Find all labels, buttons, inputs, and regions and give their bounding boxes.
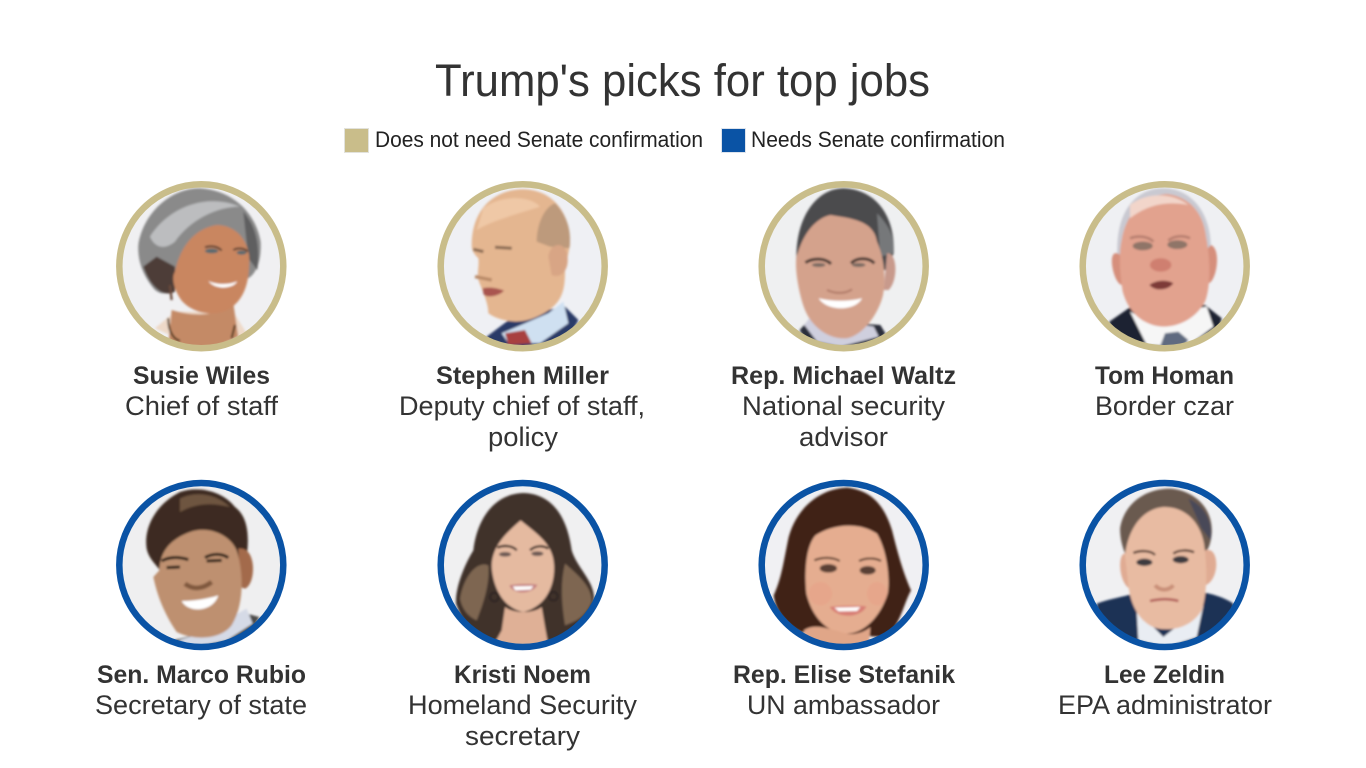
person: Marco Rubio	[95, 482, 307, 720]
portrait: Michael Waltz	[760, 183, 927, 350]
portrait: Stephen Miller	[439, 183, 606, 350]
legend	[344, 127, 1005, 152]
person: Susie Wiles	[118, 183, 285, 421]
person: Michael Waltz	[731, 183, 956, 452]
portrait: Elise Stefanik	[760, 482, 927, 648]
name: Susie Wiles	[133, 362, 270, 390]
name: Rep. Elise Stefanik	[733, 661, 955, 689]
role: National security	[742, 391, 946, 421]
portrait: Kristi Noem	[439, 482, 606, 648]
person: Tom Homan	[1081, 183, 1248, 421]
portrait: Tom Homan	[1081, 183, 1248, 350]
name: Kristi Noem	[454, 661, 591, 689]
person: Lee Zeldin	[1058, 482, 1272, 720]
portrait: Marco Rubio	[118, 482, 285, 650]
role line 2: policy	[488, 422, 559, 452]
legend label: does not need confirmation: Does not need Senate confirmation	[375, 127, 703, 152]
role: Secretary of state	[95, 690, 307, 720]
legend swatch: needs confirmation	[722, 128, 746, 152]
role: UN ambassador	[747, 690, 940, 720]
name: Lee Zeldin	[1104, 661, 1225, 689]
role: Chief of staff	[125, 391, 279, 421]
portrait: Lee Zeldin	[1081, 482, 1248, 650]
role: Homeland Security	[408, 690, 638, 720]
person: Kristi Noem	[408, 482, 638, 751]
role: Border czar	[1095, 391, 1234, 421]
person: Stephen Miller	[399, 183, 645, 452]
legend label: needs confirmation: Needs Senate confirmation	[751, 127, 1005, 152]
name: Tom Homan	[1095, 362, 1234, 390]
name: Sen. Marco Rubio	[97, 661, 306, 689]
role line 2: secretary	[465, 721, 581, 751]
person: Elise Stefanik	[733, 482, 955, 720]
portrait: Susie Wiles	[118, 183, 285, 350]
title: Trump's picks for top jobs	[435, 55, 930, 106]
name: Rep. Michael Waltz	[731, 362, 956, 390]
role line 2: advisor	[799, 422, 888, 452]
role: EPA administrator	[1058, 690, 1272, 720]
role: Deputy chief of staff,	[399, 391, 645, 421]
legend swatch: does not need confirmation	[344, 128, 368, 152]
name: Stephen Miller	[436, 362, 609, 390]
